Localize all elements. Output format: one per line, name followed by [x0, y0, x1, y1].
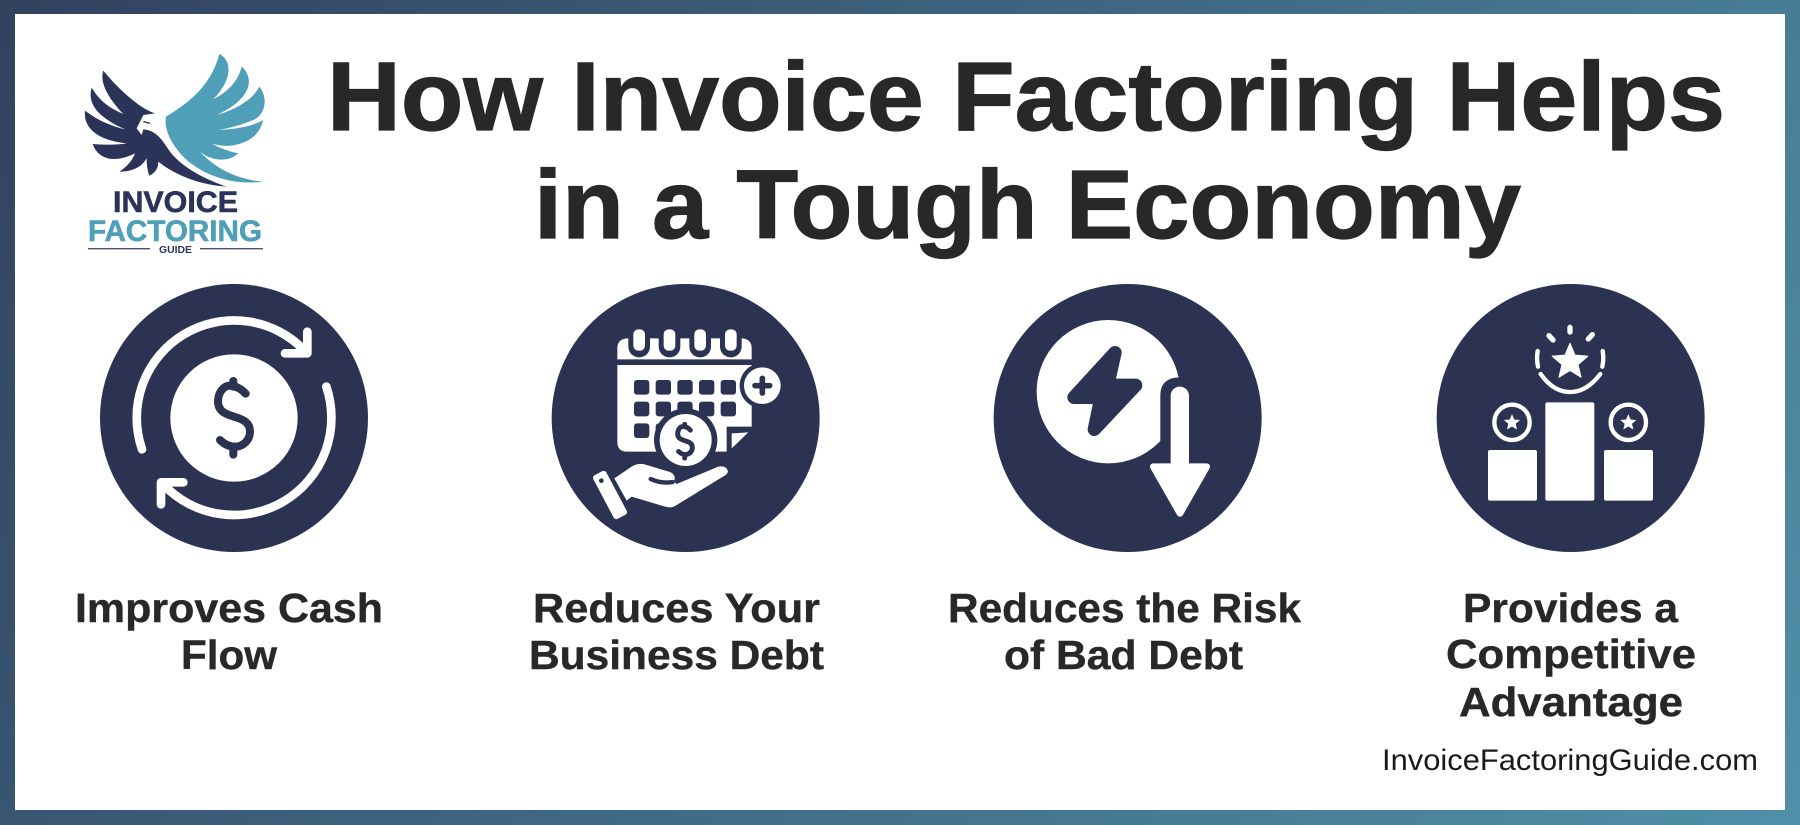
caption: Reduces Your Business Debt: Reduces Your — [533, 585, 820, 631]
caption: Reduces the Risk of Bad Debt: of Bad Debt — [1004, 632, 1243, 678]
website url: InvoiceFactoringGuide.com — [1382, 744, 1758, 777]
icon: cash flow circle — [100, 284, 368, 552]
caption: Reduces the Risk of Bad Debt — [948, 585, 1301, 678]
title: How Invoice Factoring Helps — [327, 42, 1725, 151]
logo: Invoice Factoring Guide: FACTORING — [88, 215, 262, 248]
caption: Reduces Your Business Debt: Business Debt — [529, 632, 824, 678]
title: in a Tough Economy — [534, 150, 1521, 259]
title — [327, 42, 1725, 259]
caption: Reduces the Risk of Bad Debt: Reduces the Risk — [948, 585, 1301, 631]
icon: calendar with coin and hand — [552, 284, 820, 552]
caption: Provides a Competitive Advantage: Competitive — [1446, 631, 1696, 677]
caption: Provides a Competitive Advantage: Provides a — [1463, 585, 1679, 631]
icon: eagle — [85, 54, 265, 187]
logo: Invoice Factoring Guide — [85, 54, 265, 256]
caption: Improves Cash Flow: Improves Cash — [75, 585, 383, 631]
caption: Reduces Your Business Debt — [529, 585, 824, 678]
caption: Provides a Competitive Advantage — [1446, 585, 1696, 725]
icon: lightning bolt with down arrow — [994, 284, 1262, 552]
logo: Invoice Factoring Guide: GUIDE — [159, 244, 192, 256]
caption: Provides a Competitive Advantage: Advantage — [1459, 679, 1683, 725]
logo wordmark: INVOICE — [113, 186, 238, 219]
caption: Improves Cash Flow — [75, 585, 383, 678]
caption: Improves Cash Flow: Flow — [181, 632, 277, 678]
icon: podium with stars — [1437, 284, 1705, 552]
